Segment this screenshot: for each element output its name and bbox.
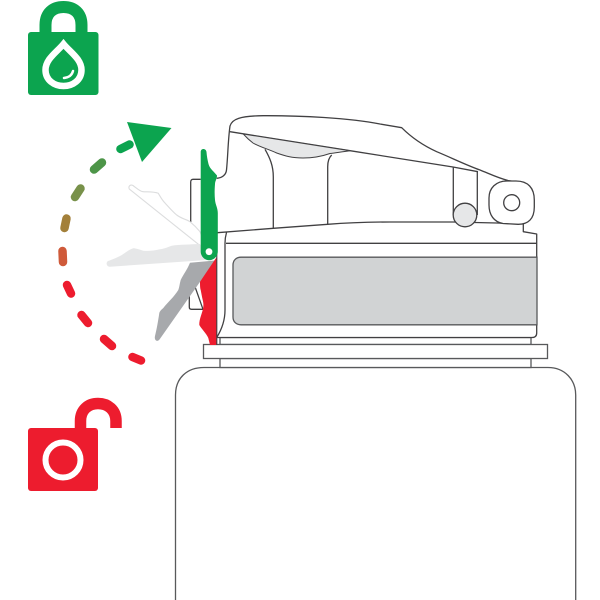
latch backing outline lower <box>189 287 203 309</box>
hinge knuckle with pin <box>489 181 534 224</box>
arrowhead <box>127 122 172 162</box>
icon: red unlocked padlock <box>28 404 116 491</box>
dashed rotation arrow <box>62 144 141 360</box>
neck ring under the lid <box>220 338 531 344</box>
icon: green locked padlock with water drop <box>28 7 98 95</box>
latch unlocked position: red <box>199 257 217 345</box>
latch right edge line <box>216 250 218 345</box>
hinge link <box>453 167 477 227</box>
latch ghost position: outline white <box>129 185 209 252</box>
bottle body <box>176 368 576 600</box>
grey label panel on lid <box>233 257 537 325</box>
latch ghost position: dark grey <box>155 260 215 341</box>
latch ghost position: light grey <box>107 244 207 267</box>
handle inner struts <box>226 149 537 243</box>
latch locked position: green <box>201 149 218 260</box>
latch backing outline upper <box>191 179 201 222</box>
lid handle and body outline <box>217 116 537 337</box>
handle grey wedge <box>243 134 350 158</box>
bottle flange <box>204 344 548 358</box>
bottle neck <box>220 358 531 368</box>
